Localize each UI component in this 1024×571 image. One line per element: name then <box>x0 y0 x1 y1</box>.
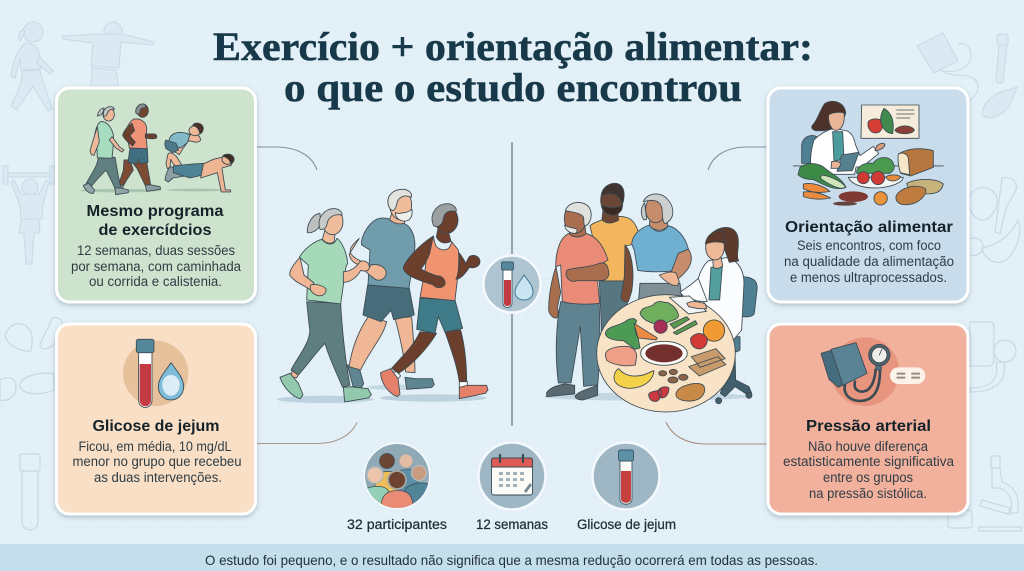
background icon: fruit and vegetables <box>968 178 1020 262</box>
description <box>72 439 242 485</box>
label: 32 participantes <box>347 517 447 532</box>
description: Ficou, em média, 10 mg/dL <box>78 439 232 454</box>
description <box>784 238 954 285</box>
description: e menos ultraprocessados. <box>790 270 947 285</box>
illustration: participants and nutritionist with food plate <box>543 183 757 412</box>
icon: central blood tube and drop <box>484 256 540 312</box>
description: ou corrida e calistenia. <box>89 274 222 289</box>
description <box>783 439 954 501</box>
description: 12 semanas, duas sessões <box>77 243 235 258</box>
title: o que o estudo encontrou <box>284 65 742 110</box>
background icon: walking woman <box>11 22 53 111</box>
panel: glicose de jejum <box>56 324 256 514</box>
label: Glicose de jejum <box>577 517 676 532</box>
background icon: test tube <box>20 454 40 530</box>
background icon: blood pressure cuff <box>917 33 1017 118</box>
background icon: barbell lifter <box>3 166 55 264</box>
footer bar <box>0 544 1024 571</box>
footer bar: O estudo foi pequeno, e o resultado não significa que a mesma redução ocorrerá em todas as pessoas. <box>205 552 818 568</box>
background icon: monitor and gauge <box>970 322 1016 392</box>
stat: glicose de jejum <box>577 442 676 532</box>
icon: blood tube <box>592 442 660 510</box>
background icon: vegetables <box>0 318 63 400</box>
description: por semana, com caminhada <box>71 259 241 274</box>
icon: people exercising <box>80 104 234 195</box>
panel: mesmo programa de exercícios: de exercídcios <box>98 222 212 239</box>
description: estatisticamente significativa <box>783 454 954 469</box>
illustration: three people walking <box>277 189 488 403</box>
description: entre os grupos <box>823 470 913 485</box>
panel: pressão arterial <box>768 324 968 514</box>
stat: 12 semanas <box>476 442 548 532</box>
label: 12 semanas <box>476 517 548 532</box>
title <box>213 24 813 110</box>
background icon: arms-out figure <box>62 22 154 88</box>
description: menor no grupo que recebeu <box>72 454 242 469</box>
description: Não houve diferença <box>808 439 928 454</box>
panel: mesmo programa de exercícios <box>56 88 256 302</box>
heading: Mesmo programa <box>86 203 224 220</box>
heading: Orientação alimentar <box>785 219 953 236</box>
description: na qualidade da alimentação <box>784 254 954 269</box>
icon: blood tube and drop <box>123 339 188 407</box>
heading: Pressão arterial <box>806 418 931 435</box>
icon: nutritionist with food <box>793 101 943 206</box>
icon: group of participants <box>364 442 430 510</box>
description <box>71 243 241 289</box>
description: na pressão sistólica. <box>809 486 927 501</box>
description: Seis encontros, com foco <box>797 238 941 253</box>
description: as duas intervenções. <box>94 470 222 485</box>
connector lines <box>256 142 767 444</box>
background icon: microscope <box>948 456 1021 531</box>
stat: 32 participantes <box>347 442 447 532</box>
icon: calendar <box>478 442 546 510</box>
title: Exercício + orientação alimentar: <box>213 24 813 69</box>
panel: orientação alimentar <box>768 88 968 302</box>
icon: blood pressure cuff <box>821 337 925 406</box>
heading: Glicose de jejum <box>92 418 220 435</box>
